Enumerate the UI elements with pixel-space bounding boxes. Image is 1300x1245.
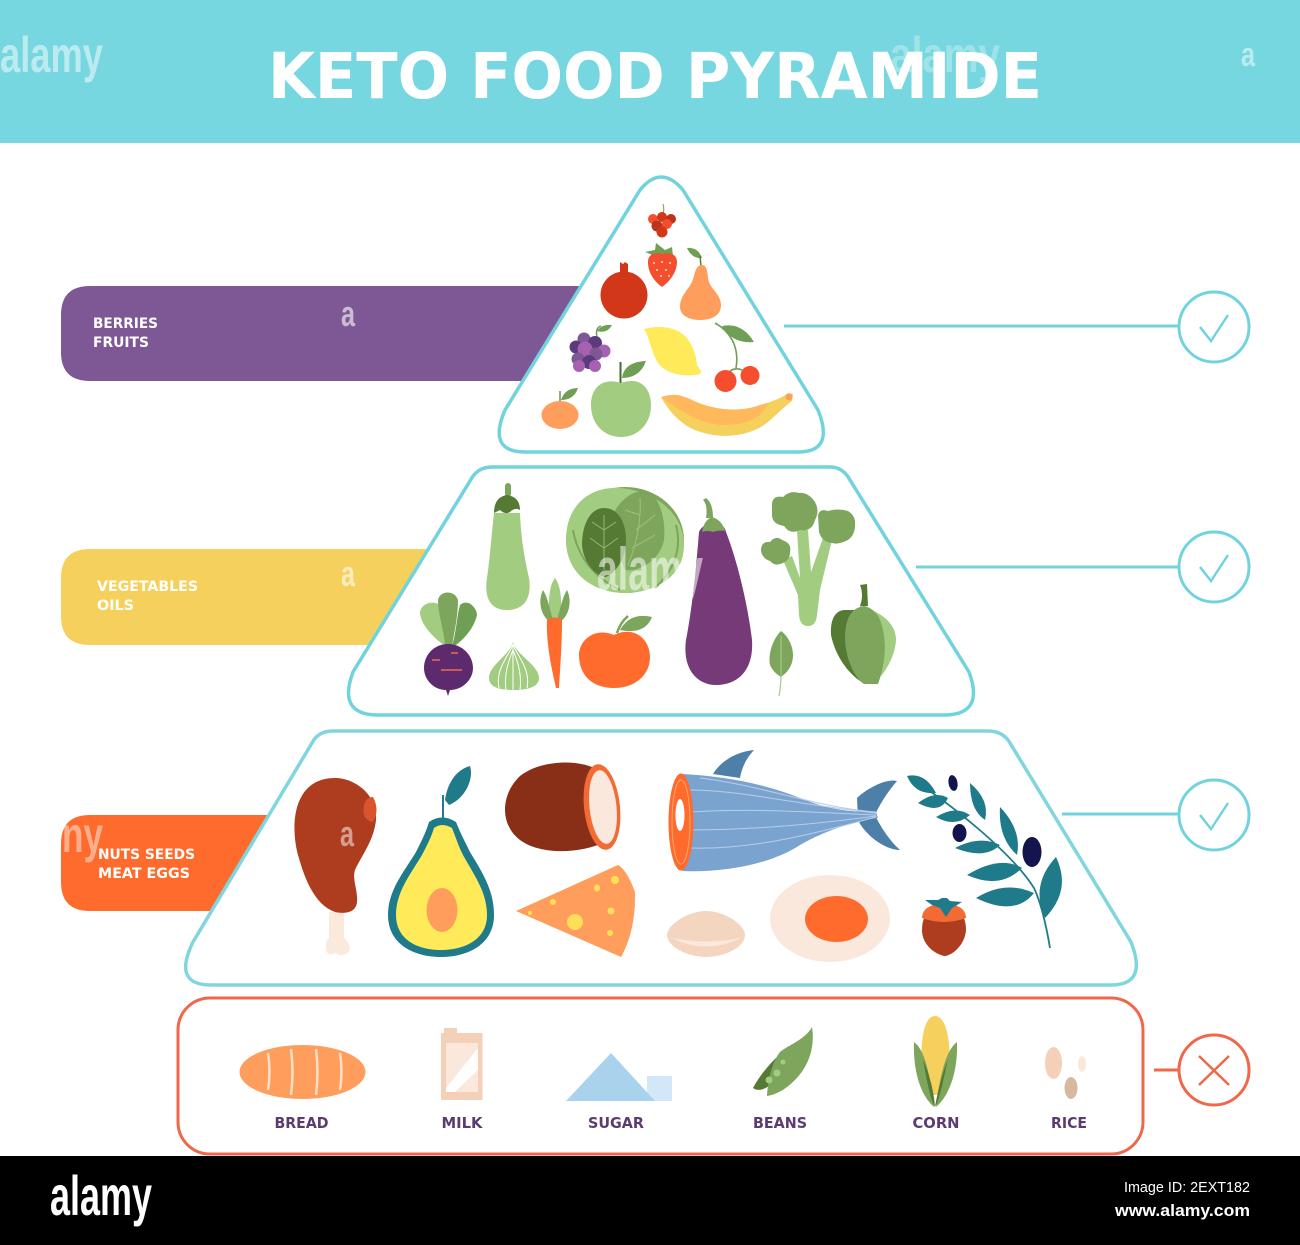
icon: strawberry (645, 243, 677, 287)
icon: chicken leg: a (340, 813, 355, 854)
icon: small leaf (769, 631, 793, 696)
icon: green apple (591, 361, 651, 437)
header banner: a (1241, 36, 1256, 74)
label: rice: RICE (1051, 1114, 1087, 1132)
pyramid tier 2: vegetables (349, 467, 973, 715)
icon: check tier 2 (1179, 532, 1249, 602)
icon: check tier 1 (1179, 292, 1249, 362)
icon: sugar (566, 1053, 672, 1101)
label: corn: CORN (912, 1114, 960, 1132)
website: www.alamy.com (1114, 1201, 1250, 1220)
footer logo: alamy (50, 1164, 152, 1227)
connector line avoid (1154, 1068, 1178, 1072)
icon: onion (489, 642, 539, 690)
footer bar (0, 1156, 1300, 1245)
connector line tier 2 (916, 566, 1178, 568)
header banner: alamy (0, 27, 103, 83)
icon: olive branch (907, 774, 1062, 948)
icon: beet (420, 592, 477, 696)
ribbon: nuts seeds meat eggs: NUTS SEEDS (98, 847, 195, 863)
ribbon: nuts seeds meat eggs: MEAT EGGS (98, 866, 190, 882)
pyramid tier 3: protein and fat (186, 731, 1136, 985)
icon: green pepper (831, 584, 896, 684)
watermark on cabbage: alamy (597, 536, 703, 603)
connector line tier 1 (784, 324, 1178, 328)
icon: grapes (570, 325, 612, 372)
icon: chicken leg (294, 778, 376, 955)
ribbon: berries fruits: FRUITS (93, 335, 149, 351)
icon: bread (240, 1045, 366, 1099)
icon: check tier 3 (1179, 780, 1249, 850)
icon: ham nut (505, 762, 624, 852)
ribbon: berries fruits: a (341, 293, 356, 334)
title: KETO FOOD PYRAMIDE (268, 40, 1042, 113)
icon: avocado (388, 766, 494, 957)
header banner (0, 0, 1300, 143)
icon: cheese (516, 865, 635, 957)
ribbon: vegetables oils: a (341, 553, 356, 594)
icon: lemon (644, 327, 701, 375)
icon: beans (753, 1027, 813, 1096)
icon: tomato (579, 616, 652, 688)
image id: Image ID: 2EXT182 (1124, 1179, 1250, 1196)
label: bread: BREAD (274, 1114, 328, 1132)
ribbon: berries fruits (61, 286, 600, 381)
ribbon: nuts seeds meat eggs: ny (62, 807, 103, 863)
icon: rice (1045, 1047, 1086, 1099)
icon: tangerine (542, 388, 578, 429)
header banner: alamy (890, 27, 1000, 83)
icon: eggplant (685, 498, 752, 685)
pyramid tier 1: fruits (499, 177, 823, 452)
ribbon: vegetables oils: VEGETABLES (97, 579, 198, 595)
icon: carrot (540, 578, 570, 688)
icon: milk (441, 1028, 482, 1100)
label: milk: MILK (442, 1114, 484, 1132)
icon: pear (680, 248, 721, 320)
icon: corn (914, 1016, 957, 1107)
icon: banana (661, 393, 793, 436)
label: sugar: SUGAR (588, 1114, 644, 1132)
icon: fried egg (770, 875, 890, 962)
ribbon: vegetables oils (61, 549, 480, 645)
ribbon: vegetables oils: OILS (97, 598, 134, 614)
connector line tier 3 (1062, 812, 1178, 816)
ribbon: nuts seeds meat eggs (61, 807, 320, 911)
label: beans: BEANS (753, 1114, 807, 1132)
icon: broccoli (761, 492, 855, 626)
panel: foods to avoid (178, 998, 1143, 1154)
icon: seed (667, 911, 745, 957)
icon: cabbage (566, 487, 684, 593)
icon: hazelnut (922, 898, 966, 956)
icon: cherries (714, 323, 760, 392)
icon: fish (668, 750, 900, 871)
icon: cross (1179, 1035, 1249, 1105)
icon: zucchini (486, 483, 530, 610)
icon: red berries (648, 204, 676, 238)
ribbon: berries fruits: BERRIES (93, 316, 158, 332)
icon: pomegranate (600, 262, 648, 318)
